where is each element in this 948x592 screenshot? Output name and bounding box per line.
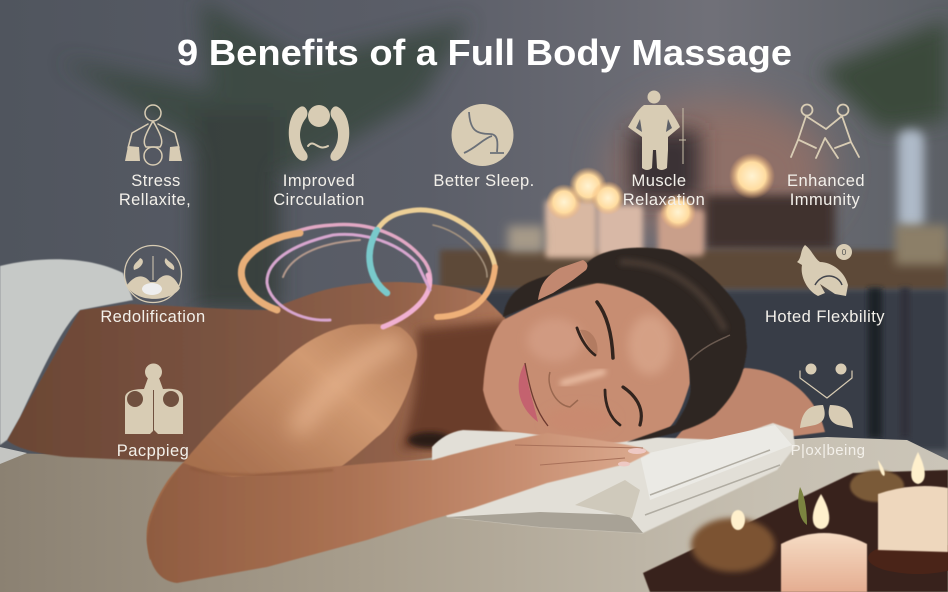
vase: [898, 130, 924, 230]
benefit: wellbeing: P|ox|being: [791, 442, 865, 459]
icon: detox circle: [124, 246, 182, 302]
right arm: [670, 368, 825, 445]
benefit: immunity: Enhanced: [787, 172, 865, 190]
benefit: circulation: Circculation: [273, 191, 365, 209]
benefit: stress relaxation: [119, 105, 191, 209]
tray: [643, 470, 948, 592]
dark ornaments: [630, 130, 700, 200]
benefit: flexibility: Hoted Flexbility: [765, 308, 885, 326]
background candles: [545, 200, 597, 258]
icon: torso: [125, 105, 182, 165]
shelf: [440, 250, 948, 290]
icon: flexibility: 0: [842, 248, 847, 257]
front arm and hand: [147, 324, 650, 583]
benefit: stress relaxation: Stress: [131, 172, 181, 190]
title: 9 Benefits of a Full Body Massage: [177, 32, 792, 73]
plant: [60, 0, 470, 310]
benefit: muscle: Muscle: [632, 172, 686, 190]
icon: linked figures: [791, 104, 859, 158]
lower wall: [440, 290, 948, 450]
benefit: detox: Redolification: [100, 308, 206, 326]
flames: [731, 452, 925, 530]
icon: sleep chair: [452, 104, 514, 166]
benefit: detox: [100, 246, 206, 326]
hair: [503, 248, 747, 442]
benefit: flexibility: [765, 244, 885, 326]
face: [483, 283, 690, 443]
massage table: [0, 437, 948, 592]
eyes, brows, nose, lips: [577, 302, 641, 425]
benefit: circulation: [273, 105, 365, 209]
body: back: [7, 282, 540, 472]
icon: man with scale: [628, 90, 686, 170]
head towel: [432, 423, 795, 533]
pink glow: [610, 100, 830, 240]
benefit: stress relaxation: Rellaxite,: [119, 191, 191, 209]
plate and cream candles: [868, 542, 948, 574]
left towel: [0, 259, 133, 445]
stone candles: [691, 518, 775, 572]
benefit: sleep: [433, 104, 535, 190]
leaf: [798, 487, 807, 525]
benefit: pacpping: Pacppieg: [117, 442, 189, 460]
ear: [538, 260, 587, 300]
benefit: immunity: [787, 104, 865, 209]
swirl rings: [241, 210, 495, 327]
benefit: pacpping: [117, 364, 189, 460]
benefit: wellbeing: [791, 364, 865, 459]
benefit: muscle: [623, 90, 705, 209]
benefit: sleep: Better Sleep.: [433, 172, 535, 190]
right plant: [820, 20, 948, 130]
icon: butterfly wellbeing: [800, 364, 853, 428]
dark chest shadow: [400, 320, 510, 450]
benefit: immunity: Immunity: [790, 191, 861, 209]
benefit: circulation: Improved: [283, 172, 355, 190]
benefit: muscle: Relaxation: [623, 191, 705, 209]
icon: paired tags: [125, 364, 183, 434]
icon: circulation: [289, 105, 349, 161]
